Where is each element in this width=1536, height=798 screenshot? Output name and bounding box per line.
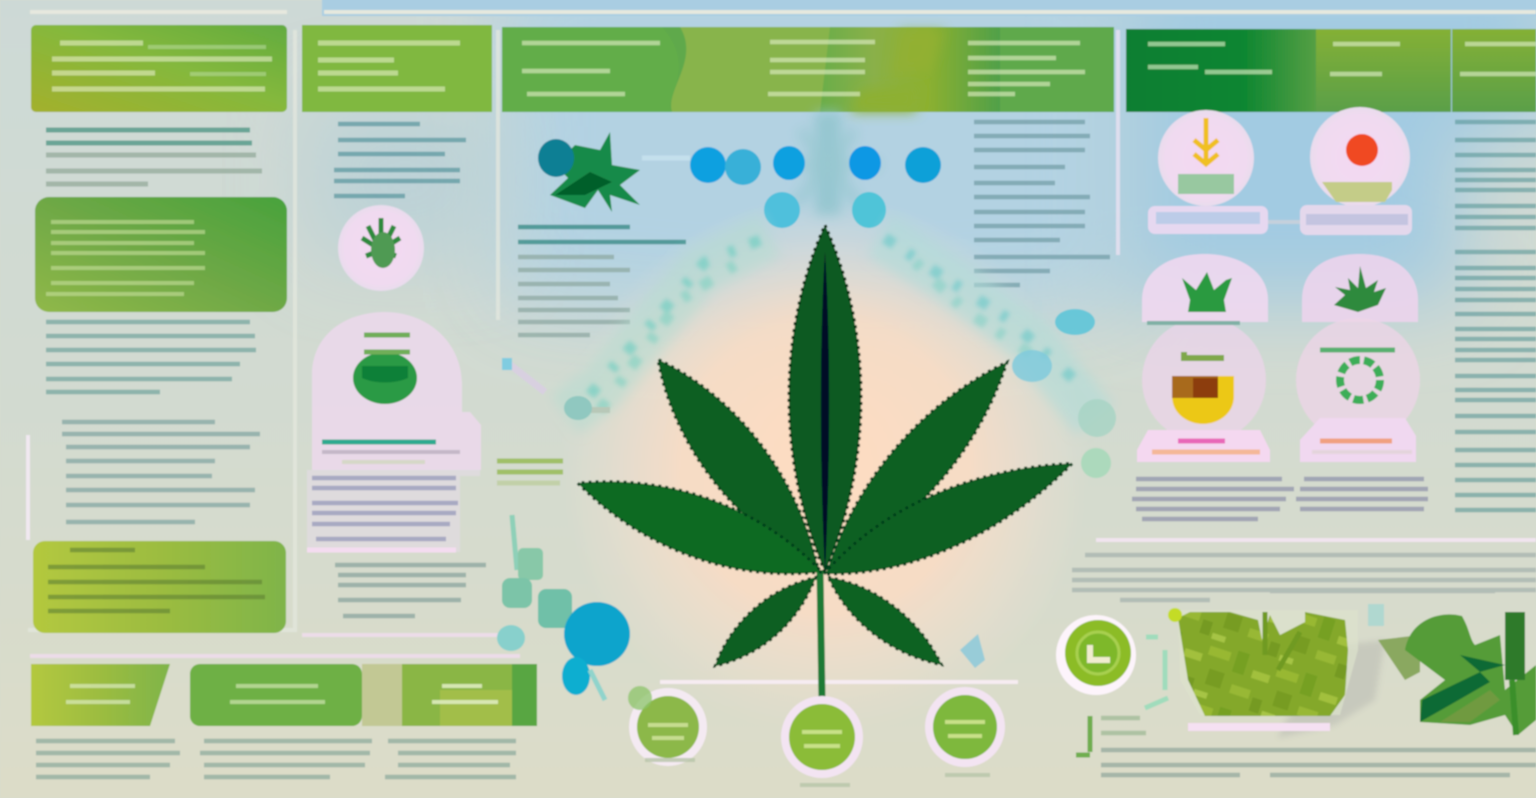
text block: purple lines bbox=[307, 470, 480, 552]
text block: intro lines bbox=[1072, 555, 1536, 600]
text block: lower bbox=[335, 565, 486, 616]
panel: bottom right bbox=[1056, 555, 1536, 775]
panel: second column bbox=[302, 25, 492, 616]
icon card: green pot bbox=[312, 312, 481, 470]
text block: middle bbox=[46, 322, 256, 392]
icon card: wheat bbox=[1148, 110, 1268, 234]
leaf stem bbox=[820, 570, 822, 700]
icon: leaf cluster bbox=[538, 132, 640, 212]
panel: right icon grid bbox=[1132, 107, 1536, 519]
text block: intro lines bbox=[46, 155, 262, 184]
icon: herb bowl bbox=[1145, 604, 1385, 738]
captions bbox=[36, 741, 516, 777]
molecule: bottom left blue bbox=[497, 461, 985, 700]
text block: bottom caption bbox=[1101, 750, 1536, 775]
leaflet: upper right bbox=[807, 344, 1028, 586]
text block bbox=[334, 124, 466, 196]
leaflet: lower right bbox=[813, 438, 1084, 599]
leaflet: bottom right bbox=[817, 563, 952, 679]
panel: bottom left tabs bbox=[31, 664, 537, 777]
text block: intro bbox=[46, 130, 252, 143]
header band bbox=[502, 27, 1114, 112]
diagonal molecule networks bbox=[502, 235, 1116, 478]
icon card: leaf and ring bbox=[1296, 254, 1420, 462]
text block: below icons right bbox=[1296, 479, 1428, 509]
icon card: leaf and amber bbox=[1137, 254, 1270, 462]
connector fill between tabs bbox=[362, 664, 402, 726]
badge 2 bbox=[781, 696, 863, 778]
header card: top left bbox=[31, 25, 287, 112]
leaflet: bottom left bbox=[703, 564, 827, 679]
node row bbox=[642, 112, 941, 228]
icon: plant badge bbox=[338, 205, 424, 291]
tab 3 bbox=[402, 664, 537, 726]
panel: centre top bbox=[502, 27, 1114, 335]
badge 1 bbox=[628, 686, 707, 766]
tab 2 bbox=[190, 664, 362, 726]
leaflet: upper left bbox=[634, 341, 842, 586]
text block: centre right bbox=[974, 122, 1110, 285]
icon: herb plant bbox=[1378, 612, 1536, 735]
text block: right column bbox=[1455, 122, 1536, 510]
header card bbox=[302, 25, 492, 112]
bottom centre badges bbox=[628, 686, 1005, 785]
leaflet: lower left bbox=[567, 455, 832, 600]
badge captions bbox=[645, 760, 990, 785]
leaflet: top bbox=[789, 225, 861, 572]
icon card: red flower bbox=[1268, 107, 1412, 235]
green callout card bbox=[35, 197, 287, 312]
icon: green clock badge bbox=[1056, 615, 1136, 695]
central cannabis leaf bbox=[567, 225, 1084, 700]
panel: right header tabs bbox=[1126, 29, 1536, 112]
panel: left column bbox=[31, 25, 287, 633]
footer card: yellow green bbox=[33, 541, 286, 633]
icon: small stem marker bbox=[1076, 716, 1090, 755]
badge 3 bbox=[925, 687, 1005, 767]
text block: centre left bbox=[518, 227, 686, 335]
tab 1 bbox=[31, 664, 170, 726]
text block: list bbox=[62, 422, 260, 522]
text block: below icons left bbox=[1132, 479, 1294, 519]
